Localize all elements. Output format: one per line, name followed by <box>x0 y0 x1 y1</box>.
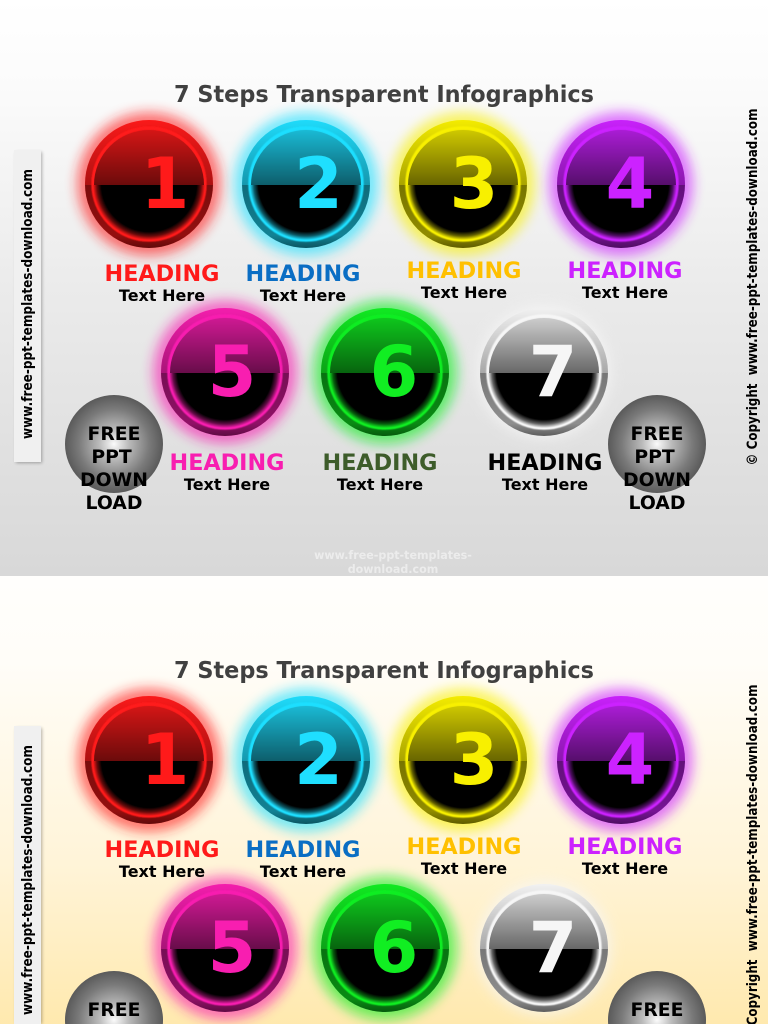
step labels: Text Here <box>184 475 270 494</box>
step labels: HEADING <box>246 837 360 863</box>
side banner left: www.free-ppt-templates-download.com <box>20 745 36 1015</box>
free download ball right <box>608 971 706 1024</box>
step 2 badge: 2 <box>294 719 343 801</box>
step 6 badge: 6 <box>370 907 418 989</box>
free download ball left: LOAD <box>86 493 142 514</box>
step labels: Text Here <box>260 862 346 881</box>
step labels: Text Here <box>421 859 507 878</box>
free download ball right: FREE <box>631 1000 683 1021</box>
side banner left: www.free-ppt-templates-download.com <box>20 169 36 439</box>
step 4 badge <box>549 112 693 256</box>
step labels <box>105 834 682 881</box>
step 3 badge: 3 <box>450 143 498 225</box>
free download ball left: FREE <box>88 1000 140 1021</box>
footer watermark <box>314 549 472 576</box>
free download ball right: LOAD <box>629 493 685 514</box>
step labels: HEADING <box>323 450 437 476</box>
side banner left <box>14 150 42 463</box>
free download ball right: FREE <box>631 424 683 445</box>
step labels: HEADING <box>407 258 521 284</box>
step labels: HEADING <box>105 261 219 287</box>
step 7 badge <box>476 304 612 440</box>
step labels <box>105 258 682 494</box>
panel: cream slide background <box>0 576 768 1024</box>
step 3 badge: 3 <box>450 719 498 801</box>
step 2 badge <box>234 112 378 256</box>
free download ball left: FREE <box>88 424 140 445</box>
step labels: HEADING <box>105 837 219 863</box>
title: 7 Steps Transparent Infographics <box>174 82 594 108</box>
step labels: Text Here <box>119 286 205 305</box>
step 2 badge: 2 <box>294 143 343 225</box>
free download ball right <box>608 395 706 514</box>
footer watermark: download.com <box>348 563 438 576</box>
panel: gray slide <box>14 82 761 576</box>
step 2 badge <box>234 688 378 832</box>
step labels: Text Here <box>337 475 423 494</box>
step labels: Text Here <box>502 475 588 494</box>
step 1 badge <box>77 688 221 832</box>
step 4 badge: 4 <box>606 143 654 225</box>
step 3 badge <box>391 112 535 256</box>
step labels: HEADING <box>568 834 682 860</box>
step 7 badge <box>476 880 612 1016</box>
free download ball right: DOWN <box>623 470 691 491</box>
step 5 badge: 5 <box>208 331 256 413</box>
step labels: Text Here <box>119 862 205 881</box>
free download ball left <box>65 971 163 1024</box>
step 1 badge <box>77 112 221 256</box>
free download ball right: PPT <box>634 447 675 468</box>
step 6 badge: 6 <box>370 331 418 413</box>
step labels: HEADING <box>170 450 284 476</box>
step labels: HEADING <box>407 834 521 860</box>
step labels: Text Here <box>260 286 346 305</box>
free download ball left: DOWN <box>80 470 148 491</box>
panel: gray slide background <box>0 0 768 576</box>
step labels: HEADING <box>488 450 602 476</box>
step 6 badge <box>313 300 457 444</box>
footer watermark: www.free-ppt-templates- <box>314 549 472 562</box>
step 1 badge: 1 <box>141 143 189 225</box>
step labels: Text Here <box>582 283 668 302</box>
step 7 badge: 7 <box>529 331 577 413</box>
step 6 badge <box>313 876 457 1020</box>
step labels: Text Here <box>421 283 507 302</box>
step labels: HEADING <box>568 258 682 284</box>
step 4 badge: 4 <box>606 719 654 801</box>
step 7 badge: 7 <box>529 907 577 989</box>
step 5 badge: 5 <box>208 907 256 989</box>
step 4 badge <box>549 688 693 832</box>
panel: cream slide <box>14 658 761 1024</box>
free download ball left: PPT <box>91 447 132 468</box>
step 3 badge <box>391 688 535 832</box>
copyright text right: © Copyright www.free-ppt-templates-download.com <box>745 108 761 466</box>
free download ball left <box>65 395 163 514</box>
step labels: Text Here <box>582 859 668 878</box>
step 1 badge: 1 <box>141 719 189 801</box>
step labels: HEADING <box>246 261 360 287</box>
title: 7 Steps Transparent Infographics <box>174 658 594 684</box>
side banner left <box>14 726 42 1024</box>
step 5 badge <box>153 876 297 1020</box>
step 5 badge <box>153 300 297 444</box>
